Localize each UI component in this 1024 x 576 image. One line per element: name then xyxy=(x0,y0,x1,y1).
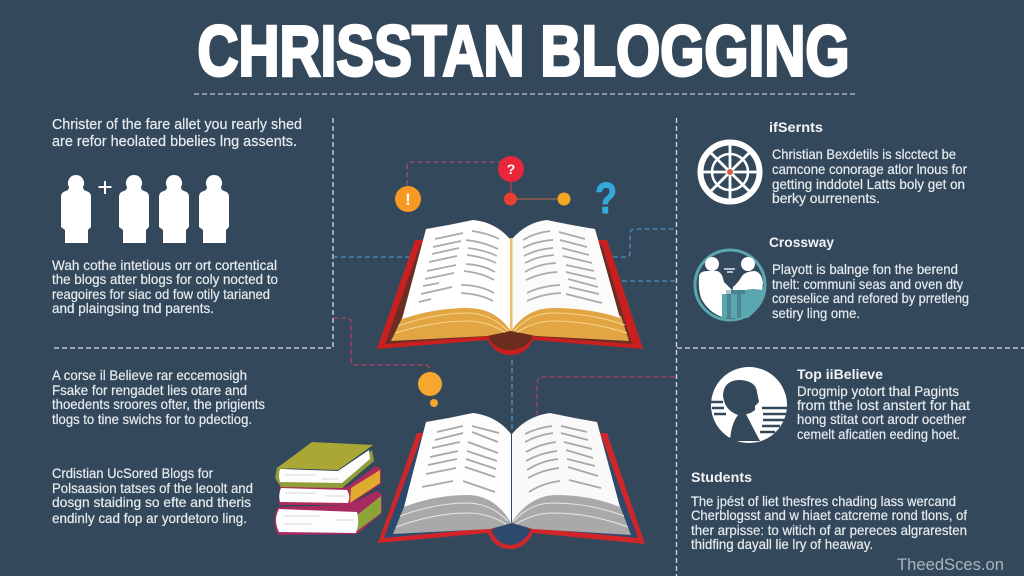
icon: wheel xyxy=(700,142,760,202)
small orange bulb icon xyxy=(418,372,442,407)
icon: silhouette xyxy=(711,367,790,443)
left text block 2: reagoires for siac od fow otily tarianed xyxy=(52,286,270,302)
body text: Playott is balnge fon the berend xyxy=(772,261,958,277)
left text block 3 xyxy=(52,367,265,427)
left text block 4: endinly cad fop ar yordetoro ling. xyxy=(52,510,247,526)
body text: ther arpisse: to witich of ar pereces algraresten xyxy=(691,522,967,538)
stack of books xyxy=(274,442,382,535)
body text: Cherblogsst and w hiaet catcreme rond tlons, of xyxy=(691,507,967,523)
panel: Top iiBelieve xyxy=(711,366,970,443)
icon: two people at table xyxy=(695,250,765,320)
icon: red question xyxy=(498,156,524,182)
left text block 4 xyxy=(52,465,253,526)
left intro text: are refor heolated bbelies lng assents. xyxy=(52,133,297,150)
body text xyxy=(691,493,967,552)
body text xyxy=(772,261,969,321)
top open book xyxy=(377,220,643,355)
left intro text: Christer of the fare allet you rearly shed xyxy=(52,116,302,133)
body text: tnelt: communi seas and oven dty xyxy=(772,276,963,292)
body text: coreselice and refored by prretleng xyxy=(772,290,969,306)
icon: blue question mark: ? xyxy=(595,174,617,223)
left text block 3: tlogs to tine swichs for to pdectiog. xyxy=(52,411,252,427)
left text block 2: the blogs atter blogs for coly nocted to xyxy=(52,271,278,287)
body text: camcone conorage atlor lnous for xyxy=(772,161,967,177)
left text block 3: Fsake for rengadet lies otare and xyxy=(52,382,247,398)
watermark: TheedSces.on xyxy=(897,555,1004,574)
connector lines xyxy=(333,162,676,432)
icon: people group xyxy=(61,175,229,243)
person four xyxy=(199,175,229,243)
body text xyxy=(797,383,970,442)
panel: Students xyxy=(691,469,967,552)
left text block 2: Wah cothe intetious orr ort cortentical xyxy=(52,257,277,273)
body text: Drogmip yotort thal Pagints xyxy=(797,383,959,399)
left text block 3: thoedents sroores ofter, the prigients xyxy=(52,396,265,412)
title: CHRISSTAN BLOGGING xyxy=(198,12,850,92)
panel: iSernts xyxy=(700,119,967,206)
person three xyxy=(159,175,189,243)
body text: getting inddotel Latts boly get on xyxy=(772,176,965,192)
body text xyxy=(772,146,967,206)
heading: ifSernts xyxy=(769,119,823,135)
icon: red dot xyxy=(504,192,517,206)
body text: hong stitat cort arodr ocether xyxy=(797,411,966,427)
left text block 2: and plaingsing tnd parents. xyxy=(52,300,214,316)
left text block 4: dosgn staiding so efte and theris xyxy=(52,494,251,510)
top book xyxy=(275,442,374,488)
body text: setiry ling ome. xyxy=(772,305,860,321)
middle book xyxy=(279,466,381,505)
heading: Crossway xyxy=(769,234,834,250)
bottom open book xyxy=(378,413,645,549)
person two xyxy=(119,175,149,243)
left intro text xyxy=(52,116,302,150)
left text block 3: A corse il Believe rar eccemosigh xyxy=(52,367,247,383)
person one xyxy=(61,175,91,243)
left text block 4: Polsaasion tatses of the leoolt and xyxy=(52,480,253,496)
left text block 4: Crdistian UcSored Blogs for xyxy=(52,465,213,481)
icon: red question: ? xyxy=(507,161,515,177)
panel: Crossway xyxy=(695,234,969,321)
icon: exclamation: ! xyxy=(405,190,411,209)
body text: The jpést of liet thesfres chading lass wercand xyxy=(691,493,956,509)
plus sign xyxy=(98,181,112,194)
icon: orange dot xyxy=(558,192,570,206)
question icons xyxy=(395,156,617,223)
heading: Top iiBelieve xyxy=(797,366,883,382)
body text: berky ourrenents. xyxy=(772,190,880,206)
bottom book xyxy=(274,491,382,535)
body text: thidfing dayall lie lry of heaway. xyxy=(691,536,873,552)
body text: Christian Bexdetils is slcctect be xyxy=(772,146,956,162)
heading: Students xyxy=(691,469,752,485)
left text block 2 xyxy=(52,257,278,316)
body text: from tthe lost anstert for hat xyxy=(797,397,970,413)
body text: cemelt aficatien eeding hoet. xyxy=(797,426,960,442)
icon: exclamation xyxy=(395,186,421,212)
